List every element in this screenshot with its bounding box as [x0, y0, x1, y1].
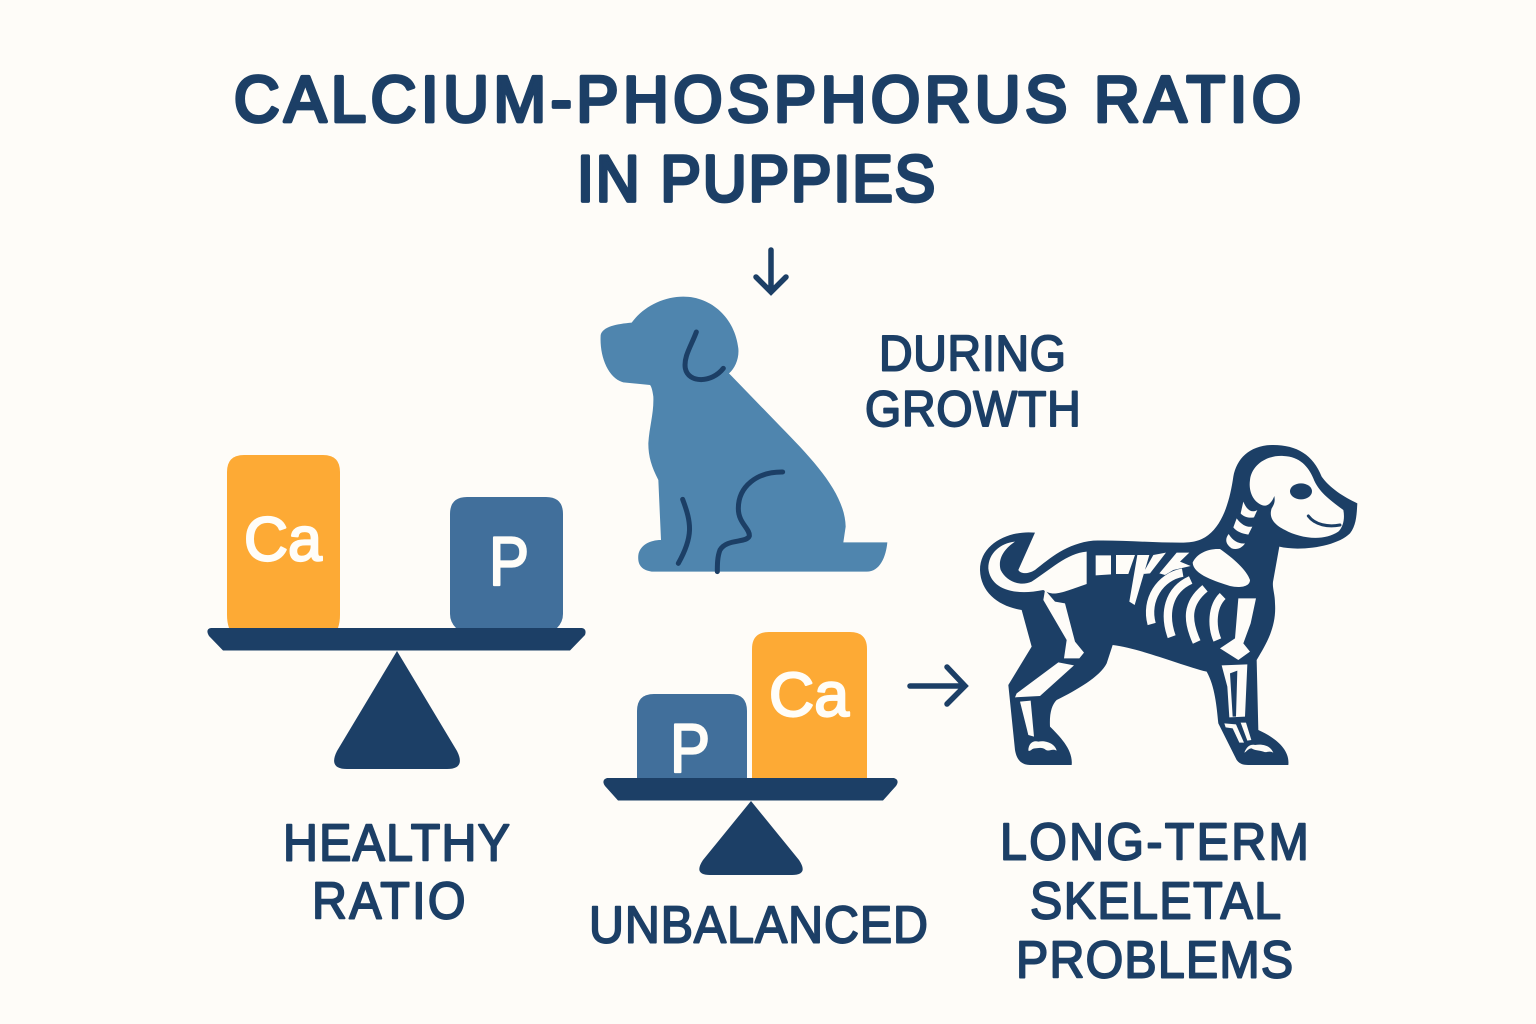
femur — [1043, 590, 1084, 658]
label: long-term skeletal problems: PROBLEMS — [1016, 931, 1293, 989]
puppy front leg line — [678, 499, 690, 563]
rear foot bone — [1020, 701, 1034, 737]
puppy ear line — [685, 332, 723, 380]
skeleton eye — [1290, 483, 1312, 499]
label: healthy ratio: RATIO — [312, 872, 465, 930]
skeleton smile — [1308, 516, 1340, 526]
arrow: to skeleton — [910, 667, 965, 704]
puppy haunch line — [717, 472, 783, 572]
phosphorus block — [637, 694, 747, 787]
title — [234, 63, 1301, 215]
calcium block — [227, 455, 340, 628]
label: during growth: GROWTH — [865, 381, 1081, 437]
title: IN PUPPIES — [577, 143, 935, 215]
arrow: down to puppy — [756, 250, 786, 292]
label: long-term skeletal problems: LONG-TERM — [1000, 813, 1309, 871]
skeleton skull — [1250, 456, 1344, 538]
balanced scale: healthy ratio — [207, 455, 586, 769]
tail and hip bone — [988, 542, 1087, 593]
phosphorus block: P — [489, 523, 529, 600]
label: healthy ratio: HEALTHY — [283, 814, 510, 872]
label: during growth — [865, 326, 1081, 437]
unbalanced scale — [603, 632, 898, 875]
rear lower leg bone — [1015, 662, 1074, 697]
shoulder blade — [1193, 549, 1250, 587]
scale fulcrum — [334, 651, 460, 769]
scale fulcrum — [699, 801, 803, 875]
calcium block: Ca — [244, 506, 323, 574]
label: long-term skeletal problems: SKELETAL — [1030, 872, 1281, 930]
ribs — [1150, 573, 1223, 642]
icon: sitting puppy — [601, 297, 887, 572]
title: CALCIUM-PHOSPHORUS RATIO — [234, 63, 1301, 136]
phosphorus block: P — [670, 710, 710, 787]
front upper leg bone — [1220, 598, 1256, 660]
neck vertebrae — [1226, 502, 1257, 549]
icon: dog skeleton — [980, 445, 1357, 765]
label: long-term skeletal problems — [1000, 813, 1309, 989]
scale beam — [603, 778, 898, 800]
front lower leg bones — [1222, 664, 1247, 717]
calcium block — [752, 632, 867, 778]
rear paw bones — [1028, 741, 1057, 751]
spine vertebrae — [1096, 553, 1191, 605]
scale beam — [207, 628, 586, 650]
label: healthy ratio — [283, 814, 510, 930]
front paw bones — [1224, 723, 1273, 753]
calcium block: Ca — [769, 661, 850, 730]
phosphorus block — [450, 497, 563, 628]
label: unbalanced: UNBALANCED — [589, 896, 928, 954]
label: during growth: DURING — [879, 326, 1066, 382]
